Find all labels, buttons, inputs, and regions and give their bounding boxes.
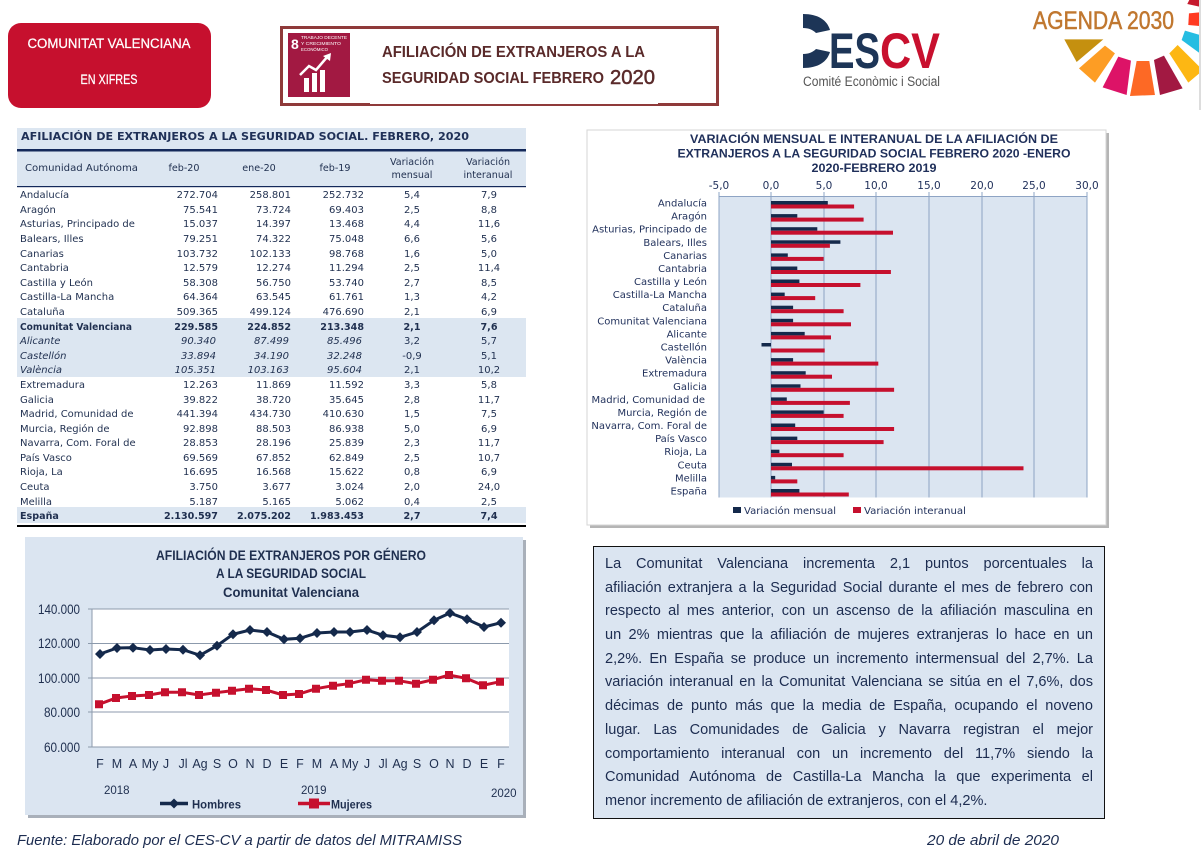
row: Navarra: 28.853 — [183, 438, 218, 449]
x axis labels: A — [129, 757, 138, 771]
x axis labels: S — [213, 757, 221, 771]
x axis labels: J — [364, 757, 370, 771]
text block: summary paragraph: 2,2%. En España se produce un incremento intermensual del 2,7%. La — [605, 651, 1093, 667]
row: Comunitat Valenciana: 7,6 — [480, 322, 498, 333]
row: Galicia: 35.645 — [329, 395, 364, 406]
row: Murcia: 86.938 — [329, 424, 364, 435]
x axis labels: J — [163, 757, 169, 771]
row: Madrid: 410.630 — [323, 409, 364, 420]
row: Galicia: 38.720 — [256, 395, 291, 406]
row: Rioja: 15.622 — [329, 467, 364, 478]
row: Madrid: 434.730 — [250, 409, 291, 420]
icon: SDG 8 decent work: 8 — [291, 36, 299, 52]
row: Melilla: 2,5 — [481, 497, 497, 508]
logo: CES CV — [803, 14, 941, 89]
row: Castilla-La Mancha: 61.761 — [329, 292, 364, 303]
row: Castilla y León — [20, 277, 497, 289]
row: Navarra: 25.839 — [329, 438, 364, 449]
row: Cantabria: 12.274 — [256, 263, 291, 274]
x axis labels: Jl — [378, 757, 388, 771]
legend — [160, 798, 372, 812]
text block: summary paragraph: Comunidad Autónoma de Castilla-La Mancha la que experimenta el — [605, 769, 1093, 785]
bars and category labels: Cataluña — [662, 303, 707, 314]
row: Canarias: 98.768 — [329, 249, 364, 260]
row: València: València — [20, 364, 62, 376]
row: Extremadura: 11.869 — [256, 380, 291, 391]
row: Ceuta: 3.024 — [335, 482, 364, 493]
row: Ceuta: 3.750 — [189, 482, 218, 493]
table: afiliación por comunidad autónoma — [17, 128, 526, 527]
bars and category labels: Rioja, La — [664, 447, 707, 458]
row: Asturias: 14.397 — [256, 219, 291, 230]
axis labels: 30,0 — [1075, 180, 1099, 192]
axis labels: 5,0 — [816, 180, 832, 192]
row: Canarias — [20, 249, 497, 260]
date: 20 de abril de 2020 — [926, 833, 1059, 849]
row: Castellón: -0,9 — [402, 351, 422, 362]
logo: CES CV: ES — [829, 23, 880, 79]
row: País Vasco: 62.849 — [329, 453, 364, 464]
row: València: 10,2 — [478, 365, 500, 376]
row: Madrid: 1,5 — [404, 409, 420, 420]
x axis labels: D — [262, 757, 272, 771]
row: Cataluña: 499.124 — [250, 307, 291, 318]
table header: Variación — [466, 156, 510, 168]
row: Comunitat Valenciana: 229.585 — [174, 322, 218, 333]
bars and category labels: Asturias, Principado de — [592, 225, 707, 236]
x axis labels: Ag — [392, 757, 408, 771]
row: Navarra — [20, 438, 500, 449]
row: Balears — [20, 234, 497, 245]
x axis labels: O — [228, 757, 238, 771]
row: Cataluña: 6,9 — [481, 307, 497, 318]
icon: SDG 8 decent work: ECONÓMICO — [301, 47, 329, 52]
row: Alicante: 87.499 — [254, 336, 289, 347]
x axis labels: S — [413, 757, 421, 771]
bars and category labels: Castellón — [661, 342, 707, 354]
row: Rioja: 16.568 — [256, 467, 291, 478]
row: Asturias: Asturias, Principado de — [20, 219, 135, 230]
red badge: Comunitat Valenciana en xifres: COMUNITAT VALENCIANA — [28, 36, 190, 51]
legend: Hombres — [192, 798, 241, 812]
title text: SEGURIDAD SOCIAL FEBRERO — [382, 70, 604, 87]
row: Aragón: 75.541 — [183, 205, 218, 216]
x axis labels: F — [497, 757, 505, 771]
row: Castilla-La Mancha: 1,3 — [404, 292, 420, 303]
y axis labels: 100.000 — [38, 671, 80, 686]
title text: 2020 — [610, 67, 655, 89]
axis labels: 20,0 — [970, 180, 994, 192]
row: Balears: 75.048 — [329, 234, 364, 245]
y axis labels: 80.000 — [44, 705, 80, 720]
x axis labels: E — [480, 757, 488, 771]
text block: summary paragraph: lugar. Las Comunidades de Galicia y Navarra registran el mejor — [605, 722, 1093, 738]
row: Castilla y León: Castilla y León — [20, 277, 93, 289]
year labels: 2018 — [104, 785, 130, 797]
row: España: 7,4 — [480, 511, 498, 522]
x axis labels: Jl — [178, 757, 188, 771]
row: País Vasco: 69.569 — [183, 453, 218, 464]
row: Murcia: 92.898 — [183, 424, 218, 435]
chart title: A LA SEGURIDAD SOCIAL — [216, 566, 366, 581]
bars and category labels: Extremadura — [642, 369, 707, 380]
row: Navarra: 2,3 — [404, 438, 420, 449]
y axis labels: 60.000 — [44, 740, 80, 755]
row: Castilla y León: 2,7 — [404, 278, 420, 289]
y axis labels: 120.000 — [38, 636, 80, 651]
row: Murcia: 88.503 — [256, 424, 291, 435]
row: Ceuta: 3.677 — [262, 482, 291, 493]
row: Cantabria: 11.294 — [329, 263, 364, 274]
row: Murcia — [20, 423, 497, 435]
row: Galicia: Galicia — [20, 395, 54, 406]
row: Andalucía — [20, 189, 497, 201]
row: Balears: 5,6 — [481, 234, 497, 245]
row: País Vasco: País Vasco — [20, 452, 72, 464]
row: Rioja: 6,9 — [481, 467, 497, 478]
row: Rioja: 0,8 — [404, 467, 420, 478]
plot area — [719, 196, 1087, 498]
row: País Vasco: 10,7 — [478, 453, 500, 464]
row: Alicante: 85.496 — [327, 336, 362, 347]
bars and category labels: Galicia — [673, 382, 707, 393]
row: Melilla: 5.187 — [189, 497, 218, 508]
row: Andalucía: Andalucía — [20, 189, 69, 201]
row: Navarra: 28.196 — [256, 438, 291, 449]
row: Asturias — [20, 219, 500, 230]
text block: summary paragraph: menor incremento de afiliación de extranjeros, con el 4,2%. — [605, 793, 987, 809]
row: Castellón: Castellón — [20, 350, 66, 362]
row: Andalucía: 5,4 — [404, 190, 420, 201]
series: Mujeres — [95, 671, 504, 708]
row: Extremadura — [20, 380, 497, 391]
table title: AFILIACIÓN DE EXTRANJEROS A LA SEGURIDAD SOCIAL. FEBRERO, 2020 — [21, 130, 469, 143]
table header: Variación — [390, 156, 434, 168]
text block: summary paragraph: La Comunitat Valenciana incrementa 2,1 puntos porcentuales la — [605, 556, 1093, 572]
bars and category labels: Castilla-La Mancha — [613, 290, 707, 301]
row: Extremadura: Extremadura — [20, 380, 85, 391]
row: Extremadura: 11.592 — [329, 380, 364, 391]
row: Balears: 79.251 — [183, 234, 218, 245]
text block: summary paragraph: respecto al mes anterior, con un ascenso de la afiliación masculina en — [605, 603, 1093, 619]
row: País Vasco: 2,5 — [404, 453, 420, 464]
x axis labels: O — [429, 757, 439, 771]
row: Andalucía: 258.801 — [250, 190, 291, 201]
row: Castilla-La Mancha — [20, 292, 497, 303]
series: Hombres — [95, 608, 506, 660]
row: Melilla: Melilla — [20, 497, 52, 508]
source note: Fuente: Elaborado por el CES-CV a partir de datos del MITRAMISS — [17, 833, 462, 849]
row: Alicante — [19, 336, 497, 347]
red badge: Comunitat Valenciana en xifres — [8, 23, 211, 108]
table header: mensual — [392, 170, 432, 181]
row: Rioja: 16.695 — [183, 467, 218, 478]
row: España — [20, 511, 498, 522]
bars and category labels: Canarias — [663, 251, 707, 262]
row: País Vasco: 67.852 — [256, 453, 291, 464]
row: Galicia: 2,8 — [404, 395, 420, 406]
x axis labels: E — [280, 757, 288, 771]
title box with SDG 8 icon — [282, 28, 718, 104]
row: Asturias: 13.468 — [329, 219, 364, 230]
row: Galicia: 11,7 — [478, 395, 500, 406]
row: Cataluña: 476.690 — [323, 307, 364, 318]
row: Castilla y León: 53.740 — [329, 278, 364, 289]
row: Andalucía: 7,9 — [481, 190, 497, 201]
x axis labels: Ag — [192, 757, 208, 771]
row: Madrid: 441.394 — [177, 409, 218, 420]
row: Castilla-La Mancha: 64.364 — [183, 292, 218, 303]
icon: SDG 8 decent work — [288, 33, 350, 97]
row: País Vasco — [20, 452, 500, 464]
bars and category labels — [591, 198, 1024, 498]
row: Castilla-La Mancha: 4,2 — [481, 292, 497, 303]
row: Ceuta: 24,0 — [478, 482, 500, 493]
row: Andalucía: 272.704 — [177, 190, 218, 201]
row: Alicante: Alicante — [19, 336, 60, 347]
table header: interanual — [464, 170, 512, 181]
table header: Comunidad Autónoma — [25, 162, 138, 174]
x axis labels: My — [142, 757, 159, 771]
axis labels: 15,0 — [917, 180, 941, 192]
row: Alicante: 5,7 — [481, 336, 497, 347]
row: Rioja — [20, 467, 497, 478]
row: España: España — [20, 511, 59, 522]
row: Extremadura: 12.263 — [183, 380, 218, 391]
bars and category labels: País Vasco — [655, 433, 707, 445]
row: Galicia — [20, 395, 500, 406]
row: Aragón: 69.403 — [329, 205, 364, 216]
row: Asturias: 11,6 — [478, 219, 500, 230]
row: Melilla — [20, 497, 497, 508]
legend — [733, 505, 966, 517]
row: Castilla-La Mancha: Castilla-La Mancha — [20, 292, 114, 303]
bars and category labels: España — [671, 486, 707, 498]
year labels: 2020 — [491, 788, 517, 800]
row: Cataluña: 509.365 — [177, 307, 218, 318]
row: Cataluña — [20, 307, 497, 318]
row: Madrid: Madrid, Comunidad de — [20, 409, 134, 420]
row: Castilla y León: 58.308 — [183, 278, 218, 289]
row: Aragón: 8,8 — [481, 205, 497, 216]
row: Navarra: Navarra, Com. Foral de — [20, 438, 136, 449]
bars and category labels: Aragón — [671, 211, 707, 223]
title text — [382, 43, 655, 89]
title text: AFILIACIÓN DE EXTRANJEROS A LA — [382, 43, 645, 61]
x axis labels: M — [312, 757, 322, 771]
row: Aragón: 2,5 — [404, 205, 420, 216]
logo: Agenda 2030 wheel: AGENDA 2030 — [1033, 7, 1174, 35]
row: València: 95.604 — [327, 365, 362, 376]
row: Asturias: 15.037 — [183, 219, 218, 230]
x axis labels: F — [296, 757, 304, 771]
row: Extremadura: 3,3 — [404, 380, 420, 391]
row: Rioja: Rioja, La — [20, 467, 63, 478]
row: Comunitat Valenciana: 2,1 — [404, 322, 421, 333]
bars and category labels: Melilla — [675, 473, 707, 484]
row: Canarias: 103.732 — [177, 249, 218, 260]
plot area — [92, 609, 509, 747]
row: Asturias: 4,4 — [404, 219, 420, 230]
axis labels: 10,0 — [864, 180, 888, 192]
row: Extremadura: 5,8 — [481, 380, 497, 391]
row: Cataluña: 2,1 — [404, 307, 420, 318]
row: Cantabria — [20, 263, 500, 274]
bars and category labels: Cantabria — [658, 264, 707, 275]
panel: bar chart variación mensual e interanual — [587, 130, 1109, 528]
row: Canarias: Canarias — [20, 249, 64, 260]
y axis labels — [38, 602, 80, 755]
row: Melilla: 5.062 — [335, 497, 364, 508]
row: Ceuta — [20, 482, 500, 493]
row: Galicia: 39.822 — [183, 395, 218, 406]
row: València: 2,1 — [404, 365, 420, 376]
x axis labels: D — [462, 757, 472, 771]
row: Aragón: Aragón — [20, 204, 56, 216]
axis labels: 25,0 — [1022, 180, 1046, 192]
row: Cantabria: 11,4 — [478, 263, 500, 274]
row: Comunitat Valenciana: 213.348 — [320, 322, 364, 333]
row: España: 2.130.597 — [164, 511, 218, 522]
bars and category labels: Ceuta — [677, 460, 707, 471]
row: Castellón: 33.894 — [181, 351, 216, 362]
row: Alicante: 90.340 — [181, 336, 216, 347]
logo: CES CV: CV — [880, 23, 941, 79]
bars and category labels: Castilla y León — [634, 276, 707, 288]
row: Cantabria: 2,5 — [404, 263, 420, 274]
row: Comunitat Valenciana: 224.852 — [247, 322, 291, 333]
bars and category labels: Madrid, Comunidad de — [592, 395, 705, 406]
row: Cantabria: 12.579 — [183, 263, 218, 274]
x axis labels: My — [342, 757, 359, 771]
axis labels: -5,0 — [709, 180, 729, 192]
text block: summary paragraph: afiliación extranjera a la Seguridad Social durante el mes de febrero con — [605, 580, 1093, 596]
row: València — [20, 364, 500, 376]
bars and category labels: Andalucía — [658, 198, 707, 210]
axis labels — [709, 180, 1099, 192]
row: Castellón: 32.248 — [327, 351, 362, 362]
text block: summary paragraph: variación interanual en la Comunitat Valenciana se sitúa en el 7,6%, dos — [605, 674, 1093, 690]
bars and category labels: Murcia, Región de — [617, 407, 707, 419]
chart title: Comunitat Valenciana — [223, 585, 359, 600]
bars and category labels: Balears, Illes — [643, 238, 707, 249]
row: Melilla: 5.165 — [262, 497, 291, 508]
row: Castilla y León: 8,5 — [481, 278, 497, 289]
x axis labels: N — [245, 757, 255, 771]
row: Balears: 6,6 — [404, 234, 420, 245]
row: Murcia: 5,0 — [404, 424, 420, 435]
bars and category labels: Alicante — [667, 329, 707, 340]
row: Ceuta: 2,0 — [404, 482, 420, 493]
legend: Mujeres — [331, 798, 372, 812]
row: España: 2,7 — [404, 511, 420, 522]
row: Castellón — [20, 350, 497, 362]
row: Comunitat Valenciana: Comunitat Valenciana — [20, 322, 132, 333]
x axis labels: M — [112, 757, 122, 771]
logo: Agenda 2030 wheel — [1033, 0, 1201, 110]
row: Balears: 74.322 — [256, 234, 291, 245]
year labels — [104, 785, 517, 800]
text block: summary paragraph — [593, 546, 1105, 819]
legend: Variación interanual — [864, 505, 966, 517]
chart title: AFILIACIÓN DE EXTRANJEROS POR GÉNERO — [156, 548, 426, 563]
legend: Variación mensual — [744, 505, 836, 517]
text block: summary paragraph: décimas de punto más que la media de España, ocupando el noveno — [605, 698, 1093, 714]
chart title: 2020-FEBRERO 2019 — [812, 161, 937, 175]
row: Castellón: 34.190 — [254, 351, 289, 362]
row: Murcia: 6,9 — [481, 424, 497, 435]
icon: SDG 8 decent work: Y CRECIMIENTO — [301, 41, 342, 46]
row: Madrid — [20, 409, 497, 420]
row: Andalucía: 252.732 — [323, 190, 364, 201]
axis labels: 0,0 — [763, 180, 779, 192]
icon: SDG 8 decent work: TRABAJO DECENTE — [301, 35, 347, 40]
chart title — [156, 548, 426, 600]
row: Madrid: 7,5 — [481, 409, 497, 420]
row: Comunitat Valenciana — [20, 322, 498, 333]
row: Aragón — [20, 204, 497, 216]
chart title: EXTRANJEROS A LA SEGURIDAD SOCIAL FEBRERO 2020 -ENERO — [678, 146, 1070, 160]
table header: ene-20 — [242, 163, 276, 174]
text block: summary paragraph: comportamiento interanual con un incremento del 11,7% siendo la — [605, 746, 1093, 762]
row: Balears: Balears, Illes — [20, 234, 84, 245]
row: España: 2.075.202 — [237, 511, 291, 522]
row: València: 103.163 — [248, 365, 289, 376]
row: Navarra: 11,7 — [478, 438, 500, 449]
x axis labels: F — [96, 757, 104, 771]
row: Canarias: 5,0 — [481, 249, 497, 260]
table header: feb-20 — [168, 163, 200, 174]
panel: line chart afiliación por género — [25, 537, 526, 818]
bars and category labels: Navarra, Com. Foral de — [591, 421, 707, 432]
red badge: Comunitat Valenciana en xifres: EN XIFRES — [80, 72, 138, 87]
row: Melilla: 0,4 — [404, 497, 420, 508]
bars and category labels: València — [665, 355, 707, 367]
row: Murcia: Murcia, Región de — [20, 423, 110, 435]
row: Canarias: 1,6 — [404, 249, 420, 260]
row: Cataluña: Cataluña — [20, 307, 65, 318]
x axis labels: N — [445, 757, 455, 771]
row: Alicante: 3,2 — [404, 336, 420, 347]
row: Castellón: 5,1 — [481, 351, 497, 362]
row: Ceuta: Ceuta — [20, 482, 50, 493]
row: Canarias: 102.133 — [250, 249, 291, 260]
year labels: 2019 — [301, 785, 327, 797]
x axis labels — [96, 757, 505, 771]
row: España: 1.983.453 — [310, 511, 364, 522]
row: Cantabria: Cantabria — [20, 263, 69, 274]
y axis labels: 140.000 — [38, 602, 80, 617]
row: Castilla y León: 56.750 — [256, 278, 291, 289]
row: Aragón: 73.724 — [256, 205, 291, 216]
table header: feb-19 — [319, 163, 351, 174]
chart title — [678, 132, 1070, 175]
row: Castilla-La Mancha: 63.545 — [256, 292, 291, 303]
x axis labels: A — [330, 757, 339, 771]
row: València: 105.351 — [175, 365, 216, 376]
bars and category labels: Comunitat Valenciana — [597, 316, 707, 327]
table header — [25, 156, 512, 181]
logo: CES CV: Comité Econòmic i Social — [803, 74, 940, 89]
chart title: VARIACIÓN MENSUAL E INTERANUAL DE LA AFILIACIÓN DE — [690, 132, 1058, 146]
text block: summary paragraph: un 2% mientras que la afiliación de mujeres extranjeras lo hace en un — [605, 627, 1093, 643]
